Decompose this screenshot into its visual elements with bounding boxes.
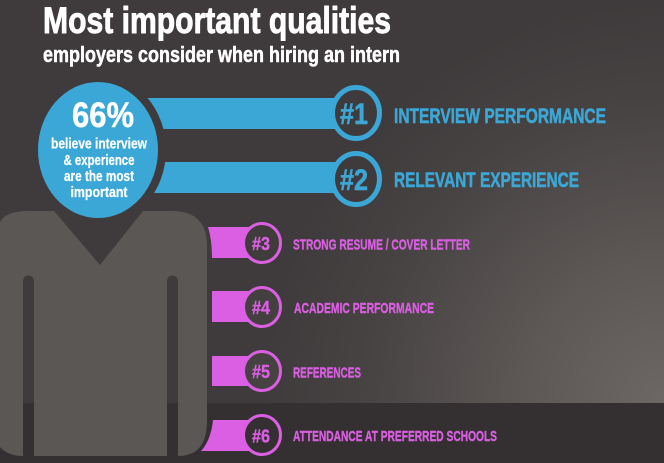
blue bar 1 <box>140 98 340 129</box>
circle caption: believe interview <box>51 136 148 152</box>
badge <box>332 154 380 204</box>
percentage: 66% <box>72 96 134 135</box>
lower seam shading <box>23 403 178 463</box>
rank 6 <box>201 416 497 454</box>
rank 2 <box>332 154 579 204</box>
ribbon <box>208 227 250 258</box>
ribbon <box>201 420 250 451</box>
circle caption: are the most <box>64 169 134 185</box>
label: REFERENCES <box>293 364 361 382</box>
speech circle <box>30 74 166 226</box>
circle caption: important <box>70 185 128 201</box>
left sleeve seam <box>23 276 34 463</box>
bottom band <box>0 403 664 463</box>
label: STRONG RESUME / COVER LETTER <box>293 236 470 254</box>
circle outline <box>30 74 166 226</box>
title: Most important qualities <box>43 0 391 41</box>
label: ATTENDANCE AT PREFERRED SCHOOLS <box>293 428 497 445</box>
ribbon <box>212 356 250 386</box>
badge number: #5 <box>252 361 270 382</box>
badge number: #6 <box>252 426 270 446</box>
rank 1 <box>332 88 606 138</box>
subtitle: employers consider when hiring an intern <box>43 42 400 67</box>
rank 3 <box>208 224 470 262</box>
badge number: #3 <box>252 233 270 254</box>
circle fill <box>38 82 158 218</box>
circle caption <box>51 136 148 201</box>
rank 5 <box>212 352 361 390</box>
rank 4 <box>212 288 434 326</box>
right sleeve seam <box>167 276 178 463</box>
circle caption: & experience <box>64 153 134 169</box>
blue bar 2 <box>140 162 340 193</box>
badge number: #1 <box>340 98 368 131</box>
shirt body <box>0 211 207 456</box>
badge <box>244 352 280 390</box>
person figure <box>0 211 207 463</box>
label: RELEVANT EXPERIENCE <box>394 168 579 192</box>
badge number: #2 <box>340 164 368 197</box>
badge <box>244 288 280 326</box>
badge <box>244 224 280 262</box>
label: ACADEMIC PERFORMANCE <box>294 300 434 317</box>
badge <box>244 416 280 454</box>
badge <box>332 88 380 138</box>
ribbon <box>212 291 250 322</box>
badge number: #4 <box>252 297 271 318</box>
